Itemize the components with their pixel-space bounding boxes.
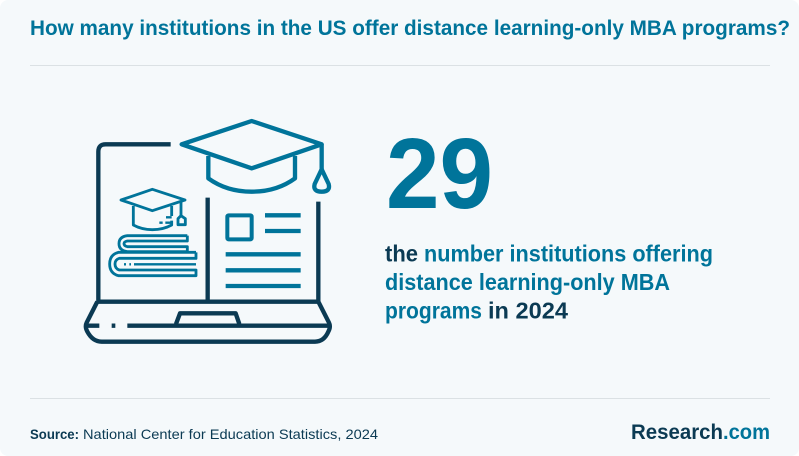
laptop screen and base: [86, 144, 330, 342]
source note: National Center for Education Statistics, 2024: [83, 426, 378, 442]
document with photo and text lines: [226, 215, 301, 286]
description text: [385, 240, 713, 324]
large graduation cap: [182, 121, 329, 192]
small cap on books: [121, 189, 185, 230]
description text: in 2024: [488, 298, 568, 324]
logo: Research.com: Research: [631, 421, 723, 444]
source note: Source:: [30, 426, 79, 442]
description text: programs: [385, 298, 482, 324]
description text: distance learning-only MBA: [385, 269, 670, 295]
logo: Research.com: .com: [723, 421, 770, 444]
icon: laptop with graduation cap and books: [86, 121, 330, 342]
stack of books: [110, 236, 196, 276]
big number: 29: [386, 118, 493, 230]
description text: the: [385, 240, 418, 266]
description text: number institutions offering: [424, 240, 713, 266]
logo: Research.com: [631, 421, 770, 444]
title: How many institutions in the US offer distance learning-only MBA programs?: [30, 16, 790, 40]
